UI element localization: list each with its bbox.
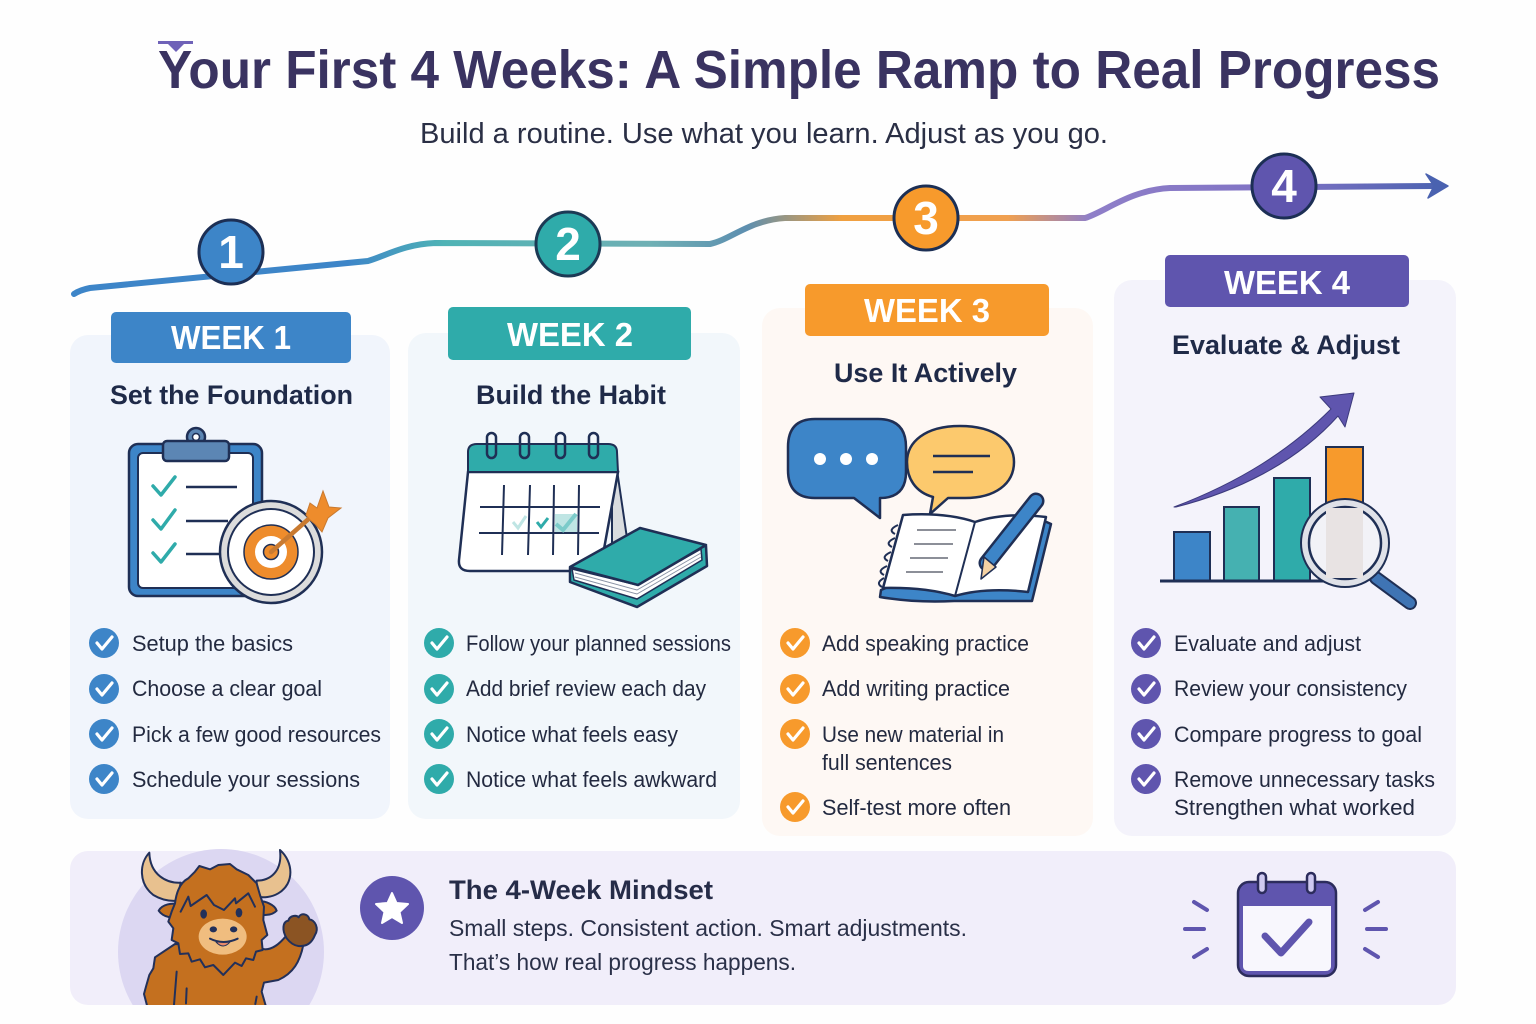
week 4 checklist: Review your consistency	[1174, 676, 1407, 701]
week 3 checklist	[780, 628, 1029, 822]
step marker 3	[894, 186, 958, 250]
week 3 heading: Use It Actively	[834, 358, 1017, 388]
week 2 checklist: Add brief review each day	[466, 676, 706, 701]
icon: clipboard and target	[129, 428, 341, 603]
week 1 heading: Set the Foundation	[110, 380, 353, 410]
step marker 2	[536, 212, 600, 276]
week 1 checklist: Choose a clear goal	[132, 676, 322, 701]
week 4 checklist	[1131, 628, 1435, 820]
icon: bar chart with magnifier	[1160, 393, 1410, 603]
week 3 checklist: Use new material in	[822, 722, 1004, 747]
panel: week 2	[408, 307, 740, 819]
panel: week 3	[762, 284, 1093, 836]
icon: star badge	[360, 876, 424, 940]
week 4 badge	[1165, 255, 1409, 307]
week 3 checklist: Self-test more often	[822, 795, 1011, 820]
week 1 badge	[111, 312, 351, 363]
week 2 checklist: Notice what feels easy	[466, 722, 678, 747]
week 1 checklist: Setup the basics	[132, 631, 293, 656]
week 1 badge: WEEK 1	[171, 319, 291, 356]
icon: calendar and book	[459, 433, 707, 607]
mindset heading: The 4-Week Mindset	[449, 875, 713, 905]
step marker 1: 1	[218, 226, 244, 278]
icon: calendar with check	[1185, 873, 1386, 976]
panel: week 1	[70, 312, 390, 819]
subtitle: Build a routine. Use what you learn. Adjust as you go.	[420, 118, 1108, 150]
step marker 3: 3	[913, 192, 939, 244]
step marker 1	[199, 220, 263, 284]
week 1 checklist: Pick a few good resources	[132, 722, 381, 747]
step marker 4: 4	[1271, 160, 1297, 212]
mascot: waving yak	[118, 849, 324, 1005]
week 1 checklist: Schedule your sessions	[132, 767, 360, 792]
timeline ramp arrow	[74, 174, 1448, 294]
week 3 badge	[805, 284, 1049, 336]
week 2 checklist: Follow your planned sessions	[466, 631, 731, 656]
week 3 checklist: Add speaking practice	[822, 631, 1029, 656]
week 2 heading: Build the Habit	[476, 380, 666, 410]
title: Your First 4 Weeks: A Simple Ramp to Real Progress	[158, 40, 1440, 100]
week 4 badge: WEEK 4	[1224, 264, 1351, 301]
panel: week 4	[1114, 255, 1456, 836]
week 3 badge: WEEK 3	[864, 292, 990, 329]
week 4 checklist: Evaluate and adjust	[1174, 631, 1361, 656]
week 4 checklist: Compare progress to goal	[1174, 722, 1422, 747]
week 4 checklist: Remove unnecessary tasks	[1174, 767, 1435, 792]
week 3 checklist: full sentences	[822, 750, 952, 775]
panel: mindset banner	[70, 849, 1456, 1005]
mindset text: Small steps. Consistent action. Smart adjustments.	[449, 915, 967, 941]
week 2 badge	[448, 307, 691, 360]
week 2 checklist	[424, 628, 731, 794]
week 2 badge: WEEK 2	[507, 316, 633, 353]
icon: speech bubbles and notebook	[788, 419, 1051, 602]
step marker 2: 2	[555, 218, 581, 270]
week 3 checklist: Add writing practice	[822, 676, 1010, 701]
week 4 checklist: Strengthen what worked	[1174, 795, 1415, 820]
week 4 heading: Evaluate & Adjust	[1172, 330, 1400, 360]
mindset text	[449, 915, 967, 975]
week 2 checklist: Notice what feels awkward	[466, 767, 717, 792]
week 1 checklist	[89, 628, 381, 794]
step marker 4	[1252, 154, 1316, 218]
mindset text: That’s how real progress happens.	[449, 949, 796, 975]
